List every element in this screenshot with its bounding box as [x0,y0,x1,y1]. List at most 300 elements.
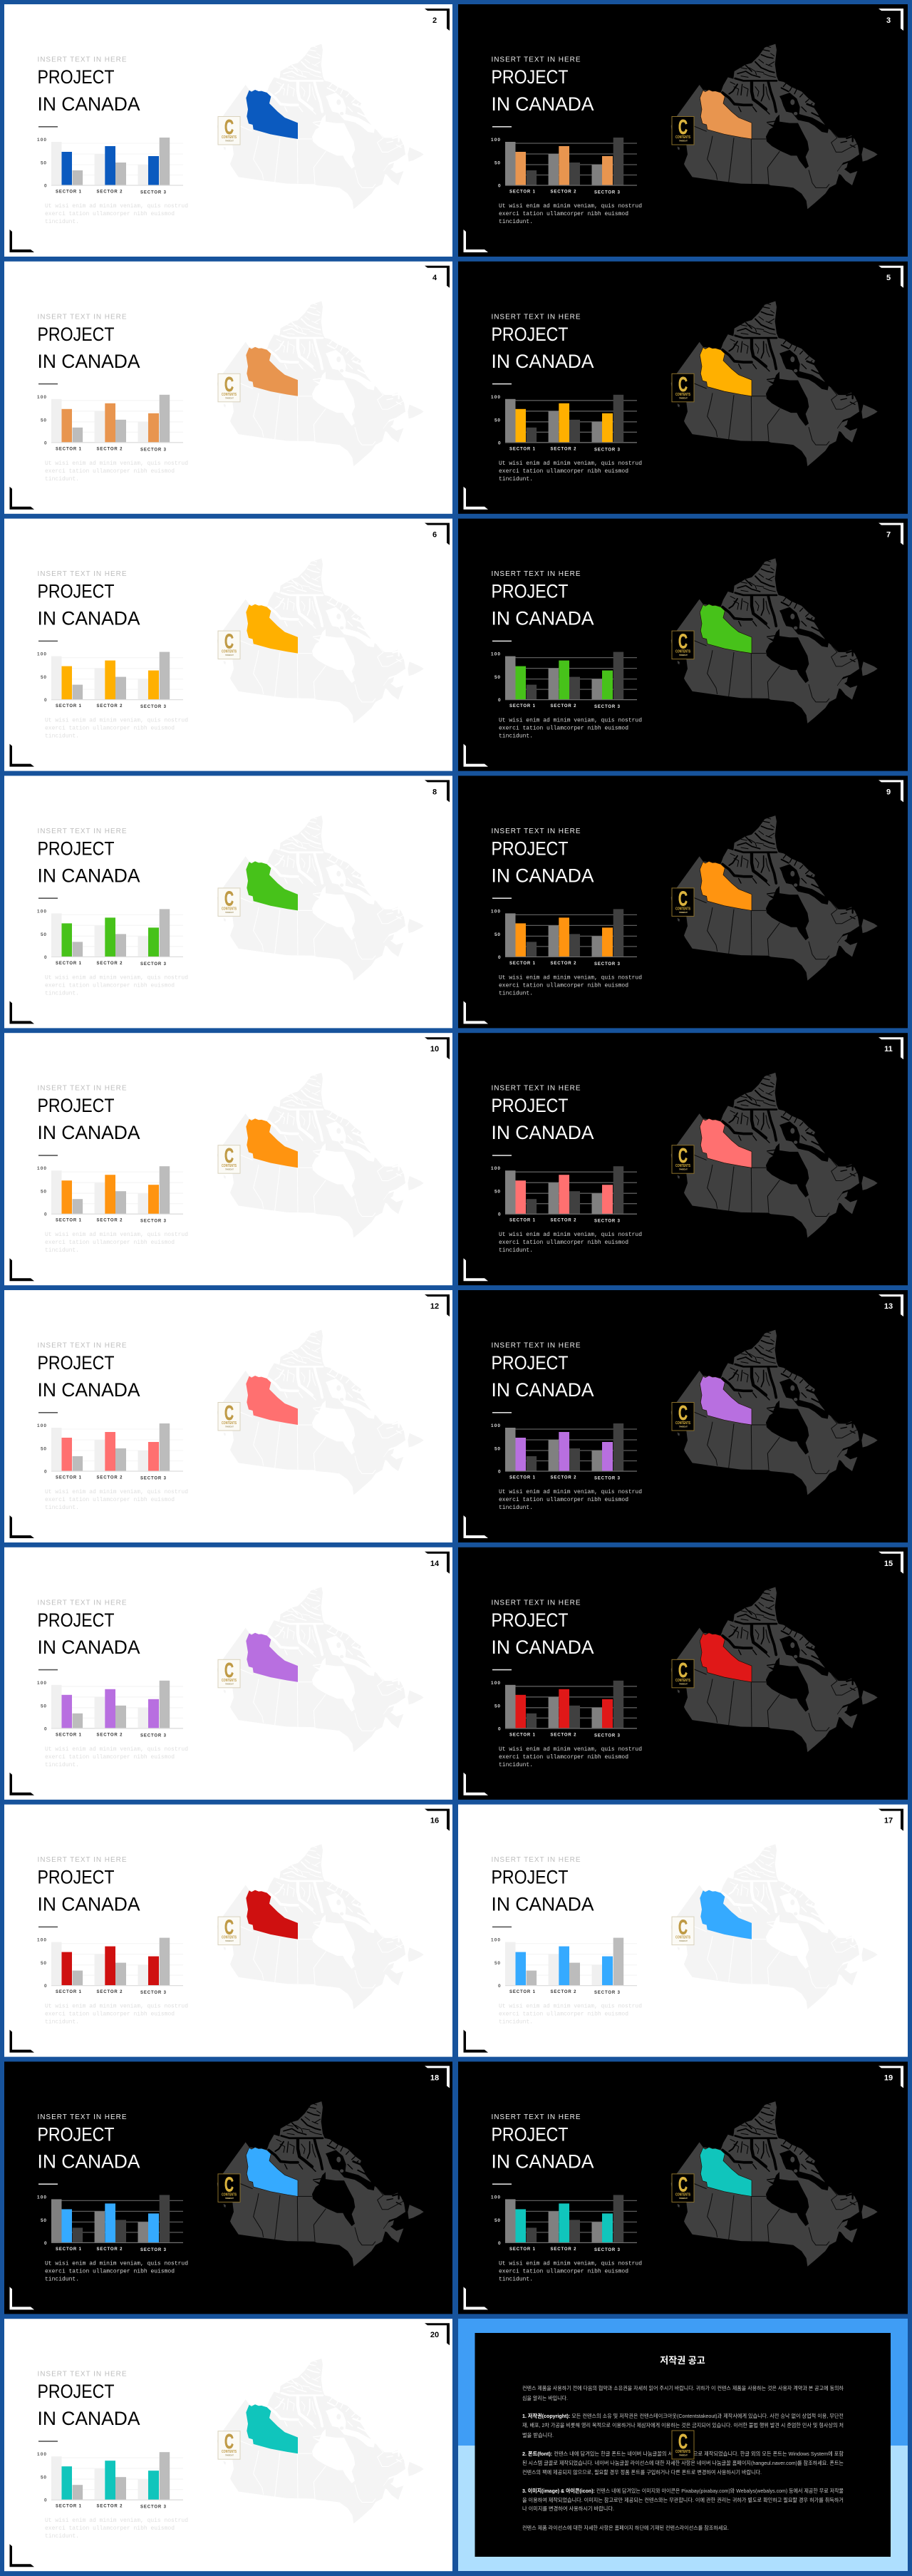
bar chart: SECTOR 2 [97,962,123,966]
bar chart: 0 [44,441,47,445]
bar chart [37,1423,183,1481]
panel: slide 20 [4,2319,452,2571]
bar chart: SECTOR 1 [56,190,82,194]
bar chart: 50 [494,1704,500,1709]
bar chart: SECTOR 3 [594,2248,621,2252]
bar chart: 100 [37,652,46,657]
title [37,1095,140,1143]
page number: 12 [430,1302,439,1311]
logo badge [218,1145,240,1173]
bar chart: SECTOR 1 [509,962,536,966]
bar chart: 100 [491,138,500,143]
body text [45,1232,188,1254]
logo badge: CONTENTS [222,1679,237,1683]
panel: slide 5 [458,262,908,514]
page number: 6 [432,531,437,540]
logo badge: TAKEOUT [679,1939,688,1942]
notice clause 3 image and icon [522,2487,844,2512]
title: IN CANADA [492,351,594,372]
corner marks [463,9,903,252]
eyebrow: INSERT TEXT IN HERE [37,1599,127,1607]
logo badge: TAKEOUT [225,1682,234,1685]
bar chart: SECTOR 1 [56,2247,82,2252]
eyebrow: INSERT TEXT IN HERE [37,828,127,835]
panel: slide 10 [4,1033,452,1285]
divider [38,126,58,128]
eyebrow: INSERT TEXT IN HERE [492,313,581,321]
bar chart: SECTOR 2 [97,1219,123,1223]
bar chart: SECTOR 2 [550,447,576,451]
eyebrow: INSERT TEXT IN HERE [37,1341,127,1350]
eyebrow: INSERT TEXT IN HERE [37,313,127,321]
bar chart: 50 [494,675,500,680]
bar chart: SECTOR 2 [550,190,576,194]
bar chart: SECTOR 2 [550,1733,576,1737]
bar chart: SECTOR 1 [56,1475,82,1480]
panel: slide 19 [458,2061,908,2314]
bar chart: 100 [37,1681,46,1686]
body text: exerci tation ullamcorper nibh euismod [45,1754,175,1761]
page number: 11 [884,1045,893,1053]
page number: 18 [430,2073,439,2082]
body text: tincidunt. [499,219,533,225]
title: IN CANADA [37,865,140,886]
title: PROJECT [37,1609,114,1631]
corner marks [463,2066,903,2309]
title: IN CANADA [37,2408,140,2429]
map of Canada with highlighted region [671,1844,878,2009]
logo badge: C [678,1145,688,1168]
bar chart [37,1938,183,1995]
body text [45,460,188,483]
body text: Ut wisi enim ad minim veniam, quis nostrud [499,1489,642,1495]
bar chart: 50 [41,932,46,937]
body text: Ut wisi enim ad minim veniam, quis nostrud [499,2260,642,2267]
page number: 9 [886,788,891,796]
map of Canada with highlighted region [671,44,878,209]
title: IN CANADA [37,1379,140,1401]
logo badge: C [224,2431,234,2453]
title: PROJECT [492,838,569,859]
notice clause 3 image and icon: 3. 이미지(image) & 아이콘(icon): 컨텐스 내에 담겨있는 이미지와 아이콘은 Pixabay(pixabay.com)와 Webalys(webalys.com) 등에서 제공한 무료 저작물 [522,2487,844,2494]
bar chart: SECTOR 2 [97,2505,123,2509]
map of Canada with highlighted region [217,301,424,466]
notice clause 3 image and icon: 나 이미지를 변경하여 사용하시기 바랍니다. [522,2505,614,2512]
title: PROJECT [492,2123,569,2145]
bar chart: SECTOR 2 [97,447,123,451]
page number: 7 [886,531,891,540]
divider [38,641,58,642]
bar chart: SECTOR 1 [56,704,82,709]
corner marks [10,1294,450,1538]
bar chart: SECTOR 3 [140,1220,167,1224]
notice clause 3 image and icon: 을 이용하여 제작되었습니다. 이미지는 참고로만 제공되는 컨텐스와는 무관합니다. 이에 관한 권리는 귀하가 별도로 확인하고 필요할 경우 허가를 취득하거 [522,2496,844,2503]
body text: exerci tation ullamcorper nibh euismod [499,982,628,989]
panel: copyright notice [458,2319,908,2571]
body text: exerci tation ullamcorper nibh euismod [499,1754,628,1761]
divider [38,1669,58,1670]
title [37,1609,140,1658]
body text [45,2004,188,2026]
body text [499,460,642,483]
corner marks [10,1809,450,2053]
map of Canada with highlighted region [217,2101,424,2267]
corner marks [463,1809,903,2053]
bar chart [37,1166,183,1224]
title: PROJECT [492,1609,569,1631]
bar chart: 100 [491,1938,500,1943]
corner marks [10,1037,450,1281]
logo badge: CONTENTS [222,650,237,654]
bar chart [491,1423,637,1481]
logo badge: TAKEOUT [225,2454,234,2457]
bar chart: SECTOR 3 [140,705,167,709]
body text: exerci tation ullamcorper nibh euismod [499,468,628,475]
corner marks [463,523,903,767]
corner marks [10,1552,450,1796]
bar chart: 0 [498,1984,501,1989]
logo badge: CONTENTS [675,2193,691,2197]
body text: exerci tation ullamcorper nibh euismod [45,2011,175,2018]
bar chart [37,909,183,967]
body text [45,1746,188,1768]
body text: tincidunt. [499,2276,533,2282]
eyebrow: INSERT TEXT IN HERE [492,1341,581,1350]
bar chart: SECTOR 1 [509,704,536,709]
bar chart: 50 [41,675,46,680]
title: PROJECT [492,1867,569,1888]
bar chart: 50 [494,161,500,165]
logo badge: CONTENTS [222,135,237,140]
logo badge: CONTENTS [222,393,237,397]
body text: tincidunt. [45,219,79,225]
corner marks [10,523,450,767]
notice clause 2 font: 2. 폰트(font): 컨텐스 내에 담겨있는 한글 폰트는 네이버 나눔글꼴의 서체를 중심으로 제작되었습니다. 한글 외의 모든 폰트는 Windows System에 포함 [522,2450,844,2457]
bar chart [491,2195,637,2252]
bar chart: SECTOR 2 [550,1475,576,1480]
corner marks [10,2323,450,2567]
corner marks [463,780,903,1024]
title: IN CANADA [37,1894,140,1915]
bar chart: 50 [41,2218,46,2223]
logo badge: TAKEOUT [679,1682,688,1685]
bar chart: SECTOR 2 [97,2247,123,2252]
page number: 4 [432,274,437,282]
notice clause 1 copyright [522,2412,844,2438]
bar chart: 0 [44,698,47,703]
title: PROJECT [37,1095,114,1116]
bar chart: 100 [37,2452,46,2457]
bar chart [37,395,183,452]
bar chart: SECTOR 1 [56,1219,82,1223]
notice clause 1 copyright: 1. 저작권(copyright): 모든 컨텐스의 소유 및 저작권은 컨텐스테이크아웃(Contentstakeout)과 제작사에게 있습니다. 사전 승낙 없이 상업적 이용, 무단전 [522,2412,844,2419]
notice heading: 저작권 공고 [660,2355,705,2366]
panel: slide 2 [4,4,452,257]
body text: Ut wisi enim ad minim veniam, quis nostrud [45,2004,188,2010]
body text: exerci tation ullamcorper nibh euismod [499,2268,628,2274]
title: PROJECT [37,1352,114,1374]
bar chart: SECTOR 2 [550,962,576,966]
notice footer: 컨텐스 제품 라이선스에 대한 자세한 사항은 홈페이지 하단에 기재된 컨텐스라이선스를 참조하세요. [522,2524,729,2531]
body text: tincidunt. [45,2533,79,2540]
bar chart [37,2452,183,2510]
logo badge: C [224,887,234,910]
logo badge: C [678,887,688,910]
body text [499,718,642,740]
panel: slide 17 [458,1805,908,2057]
body text: Ut wisi enim ad minim veniam, quis nostrud [45,1489,188,1495]
panel: slide 15 [458,1547,908,1800]
corner marks [10,2066,450,2309]
map of Canada with highlighted region [671,1073,878,1238]
body text: tincidunt. [45,990,79,996]
title: PROJECT [492,1352,569,1374]
page number: 17 [884,1817,893,1825]
notice clause 1 copyright: 재, 배포, 2차 가공을 비롯해 영리 목적으로 이용하거나 제삼자에게 이용하는 것은 금지되어 있습니다. 이러한 불법 행위 발견 시 준엄한 민사 및 형사상의 처 [522,2421,844,2428]
title: PROJECT [37,838,114,859]
bar chart: SECTOR 3 [594,705,621,709]
logo badge: C [224,1402,234,1425]
title: PROJECT [492,581,569,602]
logo badge: C [678,2431,688,2453]
body text: Ut wisi enim ad minim veniam, quis nostrud [499,1232,642,1238]
logo badge: CONTENTS [675,1679,691,1683]
bar chart: SECTOR 3 [140,1733,167,1738]
logo badge: C [224,116,234,139]
logo badge: C [678,1402,688,1425]
divider [492,641,512,642]
title: IN CANADA [37,1122,140,1143]
corner marks [10,780,450,1024]
notice clause 2 font: 컨텐스의 팩에 제공되지 않으므로, 필요할 경우 정품 폰트를 구입하거나 다른 폰트로 변경하여 사용하시기 바랍니다. [522,2468,762,2475]
body text: Ut wisi enim ad minim veniam, quis nostrud [45,203,188,210]
divider [38,897,58,899]
body text [45,2260,188,2282]
body text: exerci tation ullamcorper nibh euismod [45,468,175,475]
body text [45,1489,188,1511]
logo badge [672,373,694,402]
panel: slide 9 [458,776,908,1028]
bar chart: 50 [41,1704,46,1709]
bar chart: 0 [498,441,501,445]
bar chart: 0 [44,2241,47,2246]
bar chart: 100 [491,2195,500,2200]
logo badge [672,631,694,659]
body text: Ut wisi enim ad minim veniam, quis nostrud [499,1746,642,1753]
logo badge: CONTENTS [675,650,691,654]
bar chart: 0 [498,1726,501,1731]
logo badge: TAKEOUT [225,2197,234,2200]
logo badge [218,2173,240,2202]
panel: slide 18 [4,2061,452,2314]
body text: tincidunt. [499,1762,533,1768]
body text: tincidunt. [45,1505,79,1511]
eyebrow: INSERT TEXT IN HERE [492,1856,581,1864]
title [37,2381,140,2429]
logo badge: CONTENTS [222,1164,237,1168]
body text: exerci tation ullamcorper nibh euismod [45,211,175,217]
body text: tincidunt. [45,1762,79,1768]
bar chart: SECTOR 1 [509,447,536,451]
logo badge: CONTENTS [675,135,691,140]
bar chart: 0 [44,955,47,960]
logo badge [218,887,240,916]
body text [499,2004,642,2026]
divider [492,126,512,128]
bar chart: 100 [37,2195,46,2200]
body text: exerci tation ullamcorper nibh euismod [45,2525,175,2532]
bar chart: 0 [44,2498,47,2503]
title: IN CANADA [492,1894,594,1915]
bar chart: 50 [494,2218,500,2223]
bar chart: SECTOR 2 [97,1733,123,1737]
map of Canada with highlighted region [671,301,878,466]
logo badge: C [678,631,688,654]
bar chart: SECTOR 3 [140,1477,167,1481]
body text: tincidunt. [45,1247,79,1254]
divider [492,383,512,384]
logo badge: C [224,631,234,654]
bar chart: 100 [491,1681,500,1686]
page number: 15 [884,1560,893,1568]
title: IN CANADA [492,1122,594,1143]
eyebrow: INSERT TEXT IN HERE [492,56,581,64]
page number: 3 [886,16,891,25]
title [492,324,594,372]
notice intro [522,2384,844,2401]
eyebrow: INSERT TEXT IN HERE [37,2113,127,2121]
body text [45,974,188,996]
logo badge: TAKEOUT [225,911,234,914]
title [37,1352,140,1401]
logo badge [218,1659,240,1688]
map of Canada with highlighted region [671,815,878,981]
eyebrow: INSERT TEXT IN HERE [37,56,127,64]
body text: tincidunt. [499,2019,533,2026]
bar chart: 100 [491,1166,500,1171]
bar chart [491,1681,637,1738]
logo badge [672,2431,694,2459]
logo badge: CONTENTS [675,907,691,911]
bar chart: 100 [491,909,500,914]
bar chart [491,1938,637,1995]
body text: exerci tation ullamcorper nibh euismod [499,726,628,732]
logo badge [218,1917,240,1945]
body text: Ut wisi enim ad minim veniam, quis nostrud [45,460,188,467]
bar chart: 0 [498,1212,501,1217]
logo badge: TAKEOUT [679,1168,688,1171]
bar chart: SECTOR 3 [594,1733,621,1738]
bar chart: 100 [37,395,46,400]
map of Canada with highlighted region [217,2359,424,2524]
logo badge [672,116,694,145]
panel: slide 3 [458,4,908,257]
bar chart: SECTOR 1 [56,1990,82,1994]
bar chart [37,138,183,195]
bar chart: SECTOR 3 [140,2248,167,2252]
title [37,581,140,629]
title [37,2123,140,2172]
title [492,1095,594,1143]
bar chart: SECTOR 2 [550,1990,576,1994]
body text [499,1232,642,1254]
bar chart [37,1681,183,1738]
logo badge: C [678,2173,688,2196]
panel: slide 12 [4,1290,452,1542]
body text [45,203,188,225]
logo badge: CONTENTS [675,1936,691,1940]
logo badge: TAKEOUT [225,396,234,399]
map of Canada with highlighted region [217,44,424,209]
bar chart: 50 [494,1961,500,1966]
bar chart: SECTOR 1 [509,1219,536,1223]
logo badge: CONTENTS [675,1164,691,1168]
divider [38,1412,58,1413]
panel: slide 16 [4,1805,452,2057]
logo badge: CONTENTS [222,2450,237,2454]
bar chart: SECTOR 3 [140,1991,167,1995]
body text: exerci tation ullamcorper nibh euismod [499,1240,628,1246]
bar chart: 50 [41,2475,46,2480]
body text: exerci tation ullamcorper nibh euismod [499,1497,628,1503]
divider [492,1155,512,1156]
bar chart: SECTOR 1 [509,190,536,194]
bar chart: SECTOR 1 [56,962,82,966]
bar chart: SECTOR 1 [509,1990,536,1994]
bar chart: 0 [498,184,501,188]
bar chart: 0 [498,698,501,703]
body text: Ut wisi enim ad minim veniam, quis nostrud [45,1232,188,1238]
title [492,1352,594,1401]
bar chart: 100 [37,1166,46,1171]
body text: Ut wisi enim ad minim veniam, quis nostrud [499,718,642,724]
logo badge: CONTENTS [222,907,237,911]
body text [499,2260,642,2282]
map of Canada with highlighted region [671,2101,878,2267]
bar chart [491,395,637,452]
panel: slide 14 [4,1547,452,1800]
bar chart: SECTOR 1 [56,1733,82,1737]
title [37,1867,140,1915]
title: IN CANADA [492,93,594,115]
bar chart [491,138,637,195]
bar chart: SECTOR 2 [97,1475,123,1480]
title [492,66,594,115]
page number: 10 [430,1045,439,1053]
logo badge [672,1917,694,1945]
page number: 20 [430,2331,439,2339]
logo badge: C [224,1659,234,1682]
body text: exerci tation ullamcorper nibh euismod [45,1240,175,1246]
logo badge: TAKEOUT [225,1939,234,1942]
logo badge: C [224,1145,234,1168]
body text [45,718,188,740]
notice clause 2 font: 된 시스템 글꼴로 제작되었습니다. 네이버 나눔글꼴 라이선스에 대한 자세한 사항은 네이버 나눔글꼴 홈페이지(hangeul.naver.com)를 참조하세요. 폰트는 [522,2459,844,2466]
logo badge: CONTENTS [675,2450,691,2454]
panel: slide 4 [4,262,452,514]
divider [38,1155,58,1156]
map of Canada with highlighted region [217,815,424,981]
logo badge: TAKEOUT [679,396,688,399]
divider [492,897,512,899]
bar chart [491,652,637,709]
bar chart: 100 [491,652,500,657]
map of Canada with highlighted region [671,1587,878,1752]
bar chart: 100 [491,395,500,400]
bar chart: 0 [44,184,47,188]
logo badge [672,1402,694,1431]
title: PROJECT [492,66,569,88]
